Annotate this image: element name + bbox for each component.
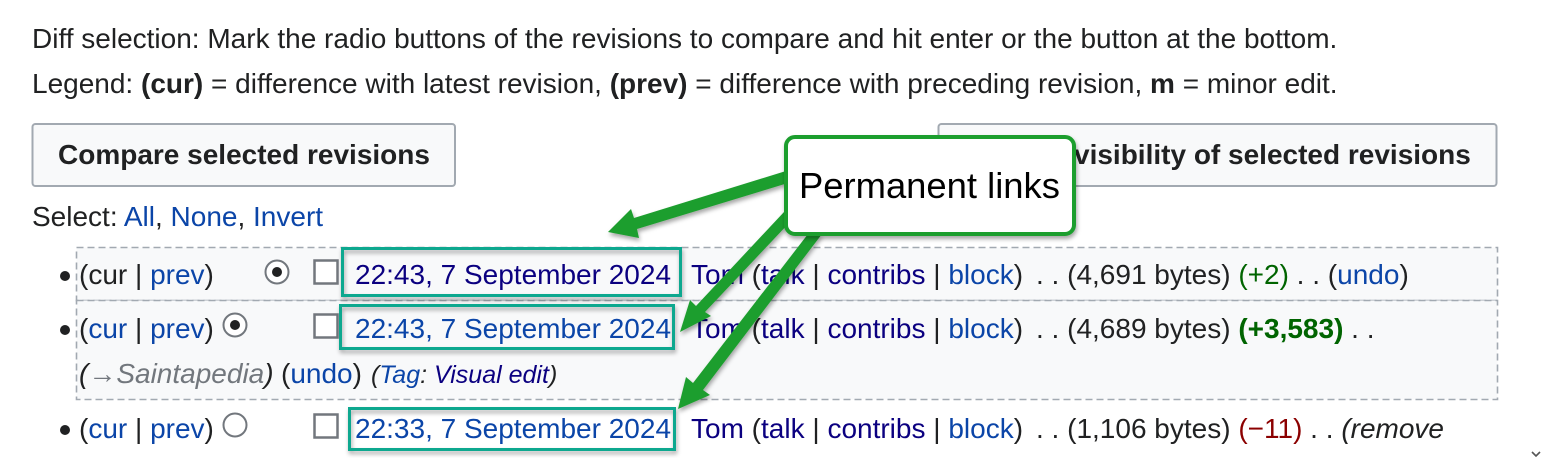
button: change visibility of selected revisions	[938, 124, 1496, 186]
text: legend: Legend: (cur) = difference with latest revision, (prev) = difference with preceding revision, m = minor edit.	[32, 68, 1338, 99]
panel: revision row 2: (→Saintapedia)	[79, 358, 274, 389]
panel: revision row 1: 22:43, 7 September 2024	[355, 259, 671, 290]
panel: revision row 2: (Tag: Visual edit)	[371, 361, 557, 389]
highlight: second permanent link	[340, 306, 674, 348]
panel: revision row 1: . . (4,691 bytes) (+2) . . (undo)	[1036, 259, 1409, 290]
callout: permanent links: Permanent links	[799, 165, 1060, 206]
text: select links: Select: All, None, Invert	[32, 201, 323, 232]
button: change visibility of selected revisions: visibility of selected revisions	[1074, 139, 1471, 170]
panel: revision row 2: 22:43, 7 September 2024	[355, 313, 671, 344]
panel: revision row 3: (cur | prev)	[79, 413, 214, 444]
icon: scroll chevron	[1532, 452, 1540, 456]
arrow: to first link	[608, 171, 788, 238]
panel: revision row 1: Tom (talk | contribs | block)	[691, 259, 1023, 290]
panel: revision row 3	[60, 413, 1444, 444]
panel: revision row 2: Tom (talk | contribs | block)	[691, 313, 1023, 344]
highlight: first permanent link	[342, 248, 680, 296]
panel: revision row 1	[60, 248, 1498, 300]
panel: revision row 2	[60, 300, 1498, 400]
panel: revision row 1: (cur | prev)	[79, 259, 214, 290]
panel: revision row 3: . . (1,106 bytes) (−11) . . (remove	[1036, 413, 1444, 444]
panel: revision row 2: (cur | prev)	[79, 313, 214, 344]
button: compare selected revisions	[32, 124, 455, 186]
panel: revision row 2: (undo)	[281, 358, 362, 389]
panel: revision row 2: . . (4,689 bytes) (+3,583) . .	[1036, 313, 1375, 344]
arrow: to third link	[678, 234, 822, 409]
button: compare selected revisions: Compare selected revisions	[58, 139, 430, 170]
arrow: to second link	[680, 212, 790, 332]
panel: revision row 3: Tom (talk | contribs | block)	[691, 413, 1023, 444]
text: diff selection instructions: Diff selection: Mark the radio buttons of the revisions to compare and hit enter or the button at the bottom.	[32, 23, 1337, 54]
callout: permanent links	[786, 137, 1074, 234]
highlight: third permanent link	[350, 408, 674, 450]
panel: revision row 3: 22:33, 7 September 2024	[355, 413, 671, 444]
